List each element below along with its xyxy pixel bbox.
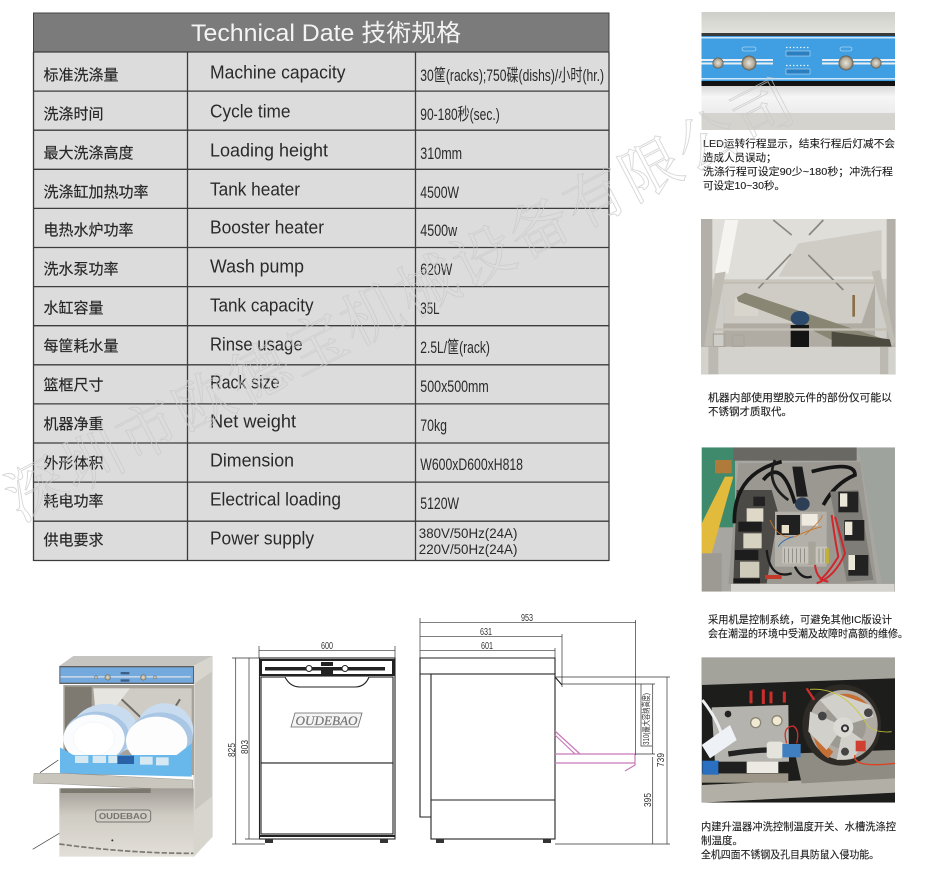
caption: interior stainless parts: 机器内部使用塑胶元件的部份仅可能以: [708, 391, 893, 404]
photo: dishwasher with open door and plates: OUDEBAO: [99, 811, 148, 821]
dimension labels: front view: 600: [321, 641, 333, 652]
row: net weight: 70kg: [420, 416, 447, 435]
caption: LED display: 造成人员误动；: [703, 151, 776, 164]
diagram: front view with dimensions: [227, 641, 395, 844]
caption: heater and temperature control: 制温度。: [701, 834, 743, 847]
photo: electrical control box: [702, 447, 895, 592]
row: net weight: 机器净重: [44, 416, 104, 433]
row: booster heater: 电热水炉功率: [44, 222, 134, 239]
row: loading height: 310mm: [420, 144, 462, 163]
row: net weight: Net weight: [210, 412, 296, 432]
row: machine capacity: 标准洗涤量: [44, 67, 119, 84]
row: rack size: [44, 372, 489, 396]
dimension labels: side view: 310(最大容纳高度): [641, 693, 651, 745]
photo: dishwasher with open door and plates: [32, 656, 213, 858]
photo: stainless steel wash chamber: [701, 219, 896, 374]
watermark: company name: 深圳市欧德宝机械设备有限公司: [0, 54, 810, 538]
row: rinse usage: 2.5L/筐(rack): [420, 338, 490, 357]
diagram: side view with dimensions: [420, 613, 670, 844]
row: booster heater: Booster heater: [210, 218, 324, 238]
dimension labels: front view: [227, 641, 333, 757]
row: power supply: 380V/50Hz(24A): [419, 525, 517, 541]
caption: control system: 采用机是控制系统，可避免其他IC版设计: [708, 613, 892, 626]
row: cycle time: 洗涤时间: [44, 106, 104, 123]
caption: interior stainless parts: 不锈钢才质取代。: [708, 405, 792, 418]
row: dimension: Dimension: [210, 450, 294, 470]
row: rack size: 篮框尺寸: [44, 376, 104, 394]
caption: heater and temperature control: 内建升温器冲洗控制温度开关、水槽洗涤控: [701, 820, 896, 833]
row: machine capacity: 30筐(racks);750碟(dishs)/小时(hr.): [420, 66, 604, 85]
row: electrical loading: [44, 490, 459, 513]
row: power supply: 供电要求: [44, 532, 104, 549]
row: power supply: 220V/50Hz(24A): [419, 541, 517, 557]
door in open position: [555, 731, 635, 771]
caption: control system: [708, 613, 908, 640]
row: tank capacity: Tank capacity: [210, 296, 314, 316]
row: rack size: 500x500mm: [420, 377, 489, 396]
caption: control system: 会在潮湿的环境中受潮及故障时高额的维修。: [708, 627, 908, 640]
row: wash pump: 洗水泵功率: [44, 261, 119, 278]
table header: Technical Date 技術规格: [191, 20, 461, 47]
dimension labels: side view: [480, 613, 667, 807]
row: machine capacity: [44, 62, 604, 85]
row: tank capacity: 35L: [420, 299, 440, 318]
row: power supply: [44, 525, 517, 557]
row: loading height: 最大洗涤高度: [44, 145, 134, 162]
row: wash pump: [44, 256, 452, 279]
row: electrical loading: 耗电功率: [44, 493, 104, 510]
dimension labels: side view: 395: [643, 793, 654, 807]
photo: LED control panel: [702, 12, 895, 130]
logo: OUDEBAO drawing badge: OUDEBAO: [296, 713, 358, 728]
caption: heater and temperature control: [701, 820, 896, 861]
row: rinse usage: 每筐耗水量: [44, 338, 119, 355]
row: cycle time: [44, 102, 500, 124]
dimension labels: side view: 953: [521, 613, 533, 624]
row: booster heater: [44, 218, 458, 240]
row: electrical loading: Electrical loading: [210, 490, 341, 510]
row: tank heater: 4500W: [420, 183, 459, 202]
row: wash pump: Wash pump: [210, 256, 304, 276]
dimension labels: side view: 601: [481, 641, 493, 652]
row: tank heater: Tank heater: [210, 180, 300, 200]
row: rinse usage: Rinse usage: [210, 334, 303, 354]
dimension labels: front view: 825: [227, 743, 238, 757]
caption: LED display: [703, 137, 895, 192]
row: tank heater: 洗涤缸加热功率: [44, 183, 149, 201]
photo: motor and thermostat: [702, 657, 895, 803]
row: wash pump: 620W: [420, 260, 452, 279]
row: tank capacity: [44, 296, 440, 318]
row: dimension: [44, 450, 523, 474]
row: electrical loading: 5120W: [420, 494, 459, 513]
table header: [34, 13, 609, 52]
caption: LED display: 洗涤行程可设定90少~180秒；冲洗行程: [703, 165, 894, 178]
caption: LED display: LED运转行程显示，结束行程后灯减不会: [703, 137, 895, 150]
caption: interior stainless parts: [708, 391, 893, 418]
dimension labels: front view: 803: [240, 740, 251, 754]
row: cycle time: Cycle time: [210, 102, 290, 122]
caption: heater and temperature control: 全机四面不锈钢及孔目具防鼠入侵功能。: [701, 848, 879, 861]
dimension labels: side view: 739: [656, 753, 667, 767]
row: cycle time: 90-180秒(sec.): [420, 105, 500, 124]
row: tank heater: [44, 180, 459, 202]
row: booster heater: 4500w: [420, 221, 458, 240]
row: rack size: Rack size: [210, 372, 280, 392]
row: dimension: W600xD600xH818: [420, 455, 523, 474]
panel: technical specification table: [34, 13, 609, 561]
dimension labels: side view: 631: [480, 627, 492, 638]
row: dimension: 外形体积: [44, 455, 104, 472]
row: power supply: Power supply: [210, 528, 314, 548]
row: net weight: [44, 412, 447, 435]
row: tank capacity: 水缸容量: [44, 299, 104, 317]
row: loading height: [44, 140, 462, 163]
caption: LED display: 可设定10~30秒。: [703, 179, 785, 192]
row: rinse usage: [44, 334, 490, 357]
row: loading height: Loading height: [210, 140, 328, 160]
row: machine capacity: Machine capacity: [210, 62, 346, 82]
